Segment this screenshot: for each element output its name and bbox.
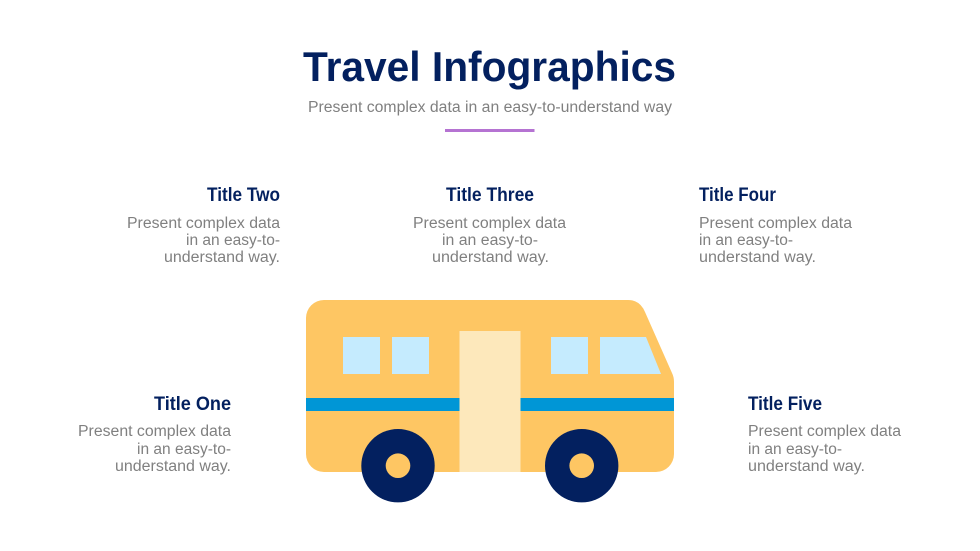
text block: Title Two: understand way.	[164, 249, 280, 266]
text block: Title Three: Present complex data	[413, 215, 566, 232]
text block: Title Five	[748, 394, 901, 475]
text block: Title Five: Present complex data	[748, 423, 901, 440]
bus body	[306, 300, 674, 472]
window 1	[343, 337, 380, 374]
text block: Title Five: in an easy-to-	[748, 441, 842, 458]
text block: Title One: understand way.	[115, 458, 231, 475]
window 2	[392, 337, 429, 374]
text block: Title Four	[699, 185, 852, 266]
blue stripe	[306, 398, 674, 411]
text block: Title Four: understand way.	[699, 249, 816, 266]
text block: Title Two	[127, 185, 280, 266]
accent rule under subtitle	[445, 129, 534, 132]
text block: Title One	[78, 394, 231, 475]
subtitle: Present complex data in an easy-to-understand way	[308, 99, 672, 116]
front wheel	[545, 429, 618, 502]
text block: Title One: Title One	[154, 394, 231, 415]
text block: Title Four: Title Four	[699, 185, 777, 206]
text block: Title Three: understand way.	[432, 249, 549, 266]
icon: bus	[306, 300, 674, 502]
rear wheel	[361, 429, 435, 502]
text block: Title Four: Present complex data	[699, 215, 852, 232]
door	[460, 331, 520, 472]
text block: Title Three	[413, 185, 566, 266]
window 3	[551, 337, 588, 374]
text block: Title Two: in an easy-to-	[186, 232, 280, 249]
title: Travel Infographics	[303, 43, 676, 90]
text block: Title Two: Title Two	[207, 185, 280, 206]
text block: Title Three: Title Three	[446, 185, 534, 206]
text block: Title One: in an easy-to-	[137, 441, 231, 458]
text block: Title Two: Present complex data	[127, 215, 280, 232]
text block: Title Five: understand way.	[748, 458, 865, 475]
windshield	[600, 337, 661, 374]
text block: Title Five: Title Five	[748, 394, 822, 415]
text block: Title Four: in an easy-to-	[699, 232, 793, 249]
text block: Title One: Present complex data	[78, 423, 231, 440]
text block: Title Three: in an easy-to-	[442, 232, 538, 249]
